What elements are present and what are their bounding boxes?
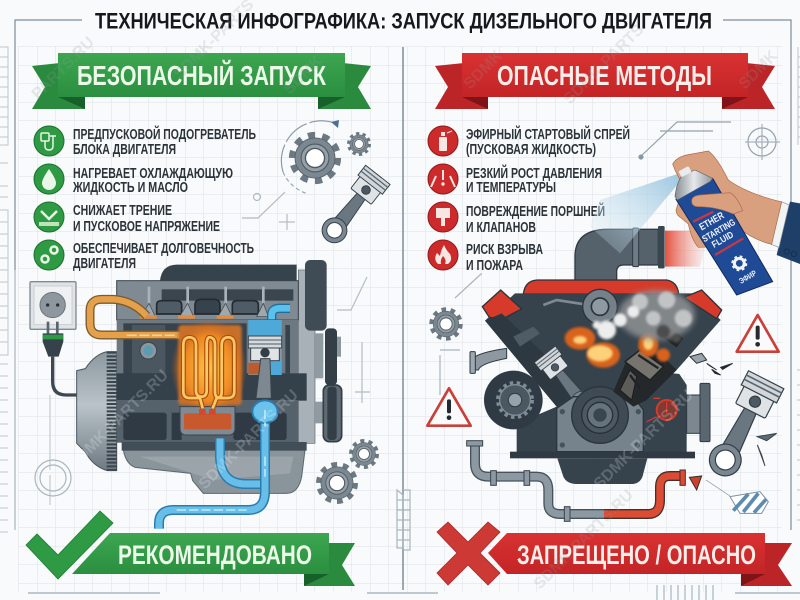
explosion: fire bbox=[565, 327, 670, 368]
front plate and pulley bbox=[510, 387, 695, 484]
text: piston line two: И КЛАПАНОВ bbox=[466, 220, 536, 236]
banner: recommended: РЕКОМЕНДОВАНО bbox=[118, 540, 312, 570]
spray can bbox=[675, 166, 773, 295]
text: durability: ОБЕСПЕЧИВАЕТ ДОЛГОВЕЧНОСТЬ bbox=[73, 241, 254, 257]
engine: safe preheated cutaway bbox=[30, 260, 342, 529]
icon: drop bbox=[34, 164, 64, 194]
text: explosion: РИСК ВЗРЫВА bbox=[466, 242, 543, 258]
watermarks: SDMK bbox=[461, 47, 506, 93]
engine block bbox=[117, 260, 342, 493]
flywheel bbox=[77, 352, 117, 471]
socket and plug bbox=[30, 282, 78, 395]
text: heater line two: БЛОКА ДВИГАТЕЛЯ bbox=[73, 142, 176, 158]
banner: safe start bbox=[32, 53, 371, 109]
text: pre-start heater: ПРЕДПУСКОВОЙ ПОДОГРЕВАТЕЛЬ bbox=[73, 125, 256, 143]
list: safe benefits bbox=[34, 125, 256, 272]
side flanges bbox=[470, 348, 710, 442]
icon: spray can bbox=[428, 126, 458, 156]
banner: safe start: БЕЗОПАСНЫЙ ЗАПУСК bbox=[77, 59, 327, 91]
pipe line gray to red bbox=[467, 441, 685, 521]
icon: piston damage bbox=[428, 202, 458, 232]
valves and ports bbox=[140, 287, 290, 319]
thumb bbox=[692, 193, 743, 214]
text: pressure line two: И ТЕМПЕРАТУРЫ bbox=[466, 180, 556, 196]
icon: flame bbox=[428, 240, 458, 270]
piston inside bbox=[534, 346, 599, 419]
cross mark bbox=[437, 522, 500, 585]
text: coolant line two: ЖИДКОСТЬ И МАСЛО bbox=[72, 180, 188, 196]
block rupture and shards bbox=[673, 338, 777, 466]
coolant pipes bbox=[159, 400, 278, 529]
banner: forbidden bbox=[488, 533, 792, 586]
red fragment with pointer bbox=[689, 476, 730, 496]
watermarks: SDMK-PARTS.RU bbox=[591, 387, 697, 493]
watermarks: SDMK-PARTS.RU bbox=[531, 487, 637, 593]
banner: dangerous methods: ОПАСНЫЕ МЕТОДЫ bbox=[497, 60, 712, 91]
block and heads bbox=[482, 280, 722, 457]
watermarks: SDMK-PARTS bbox=[561, 21, 648, 108]
engine: damaged V-engine bbox=[427, 226, 784, 521]
icon: pressure bbox=[428, 164, 458, 194]
text: piston damage: ПОВРЕЖДЕНИЕ ПОРШНЕЙ bbox=[466, 202, 605, 220]
suit sleeve bbox=[771, 202, 800, 264]
watermarks: SDMK bbox=[281, 52, 326, 98]
watermarks: SDMK bbox=[736, 47, 781, 93]
icon: socket and plug bbox=[34, 126, 64, 156]
text: friction line two: И ПУСКОВОЕ НАПРЯЖЕНИЕ bbox=[73, 219, 220, 235]
check mark bbox=[26, 511, 113, 579]
text: ether spray: ЭФИРНЫЙ СТАРТОВЫЙ СПРЕЙ bbox=[466, 125, 630, 143]
orange oil pipe bbox=[90, 299, 188, 343]
warning triangle right bbox=[737, 315, 779, 352]
icons: small gears bbox=[320, 442, 376, 500]
spray can: STARTING bbox=[700, 217, 737, 244]
hand back bbox=[673, 151, 782, 247]
glowing heater element bbox=[171, 318, 247, 435]
text: pressure: РЕЗКИЙ РОСТ ДАВЛЕНИЯ bbox=[466, 164, 602, 182]
hatched section bbox=[730, 492, 768, 513]
icon: piston and connecting rod bbox=[315, 165, 390, 250]
icon: gears bbox=[34, 240, 64, 270]
piston fragment bbox=[700, 371, 784, 483]
text: ether line two: (ПУСКОВАЯ ЖИДКОСТЬ) bbox=[466, 142, 596, 158]
spray cloud bbox=[590, 173, 680, 253]
watermarks: SDMK-PARTS.RU bbox=[196, 387, 302, 493]
spray can: ЭФИР bbox=[737, 268, 759, 286]
spray can: FLUID bbox=[710, 229, 735, 250]
text: reduces friction: СНИЖАЕТ ТРЕНИЕ bbox=[73, 203, 172, 219]
banner: recommended bbox=[72, 533, 355, 586]
icon: large gear with rotation arrow bbox=[281, 120, 369, 194]
timing gear bbox=[484, 371, 543, 429]
banner: dangerous methods bbox=[435, 53, 775, 109]
explosion: wreckage bbox=[613, 320, 683, 407]
intake pipe bbox=[575, 226, 710, 281]
explosion: smoke bbox=[593, 290, 695, 343]
list: dangers bbox=[428, 125, 630, 274]
icon: reduction arrow bbox=[34, 202, 64, 232]
small gear bbox=[432, 310, 460, 338]
text: heats coolant: НАГРЕВАЕТ ОХЛАЖДАЮЩУЮ bbox=[73, 166, 233, 182]
text: durability line two: ДВИГАТЕЛЯ bbox=[73, 256, 136, 272]
watermarks: SDMK-PARTS.RU bbox=[66, 367, 172, 473]
watermarks: PARTS.RU bbox=[29, 34, 98, 103]
hand holding ether spray can bbox=[590, 151, 800, 295]
text: explosion line two: И ПОЖАРА bbox=[466, 258, 523, 274]
piston cylinder with coolant bbox=[248, 320, 282, 398]
spray can: ETHER bbox=[698, 210, 726, 233]
warning triangle left bbox=[427, 388, 471, 426]
